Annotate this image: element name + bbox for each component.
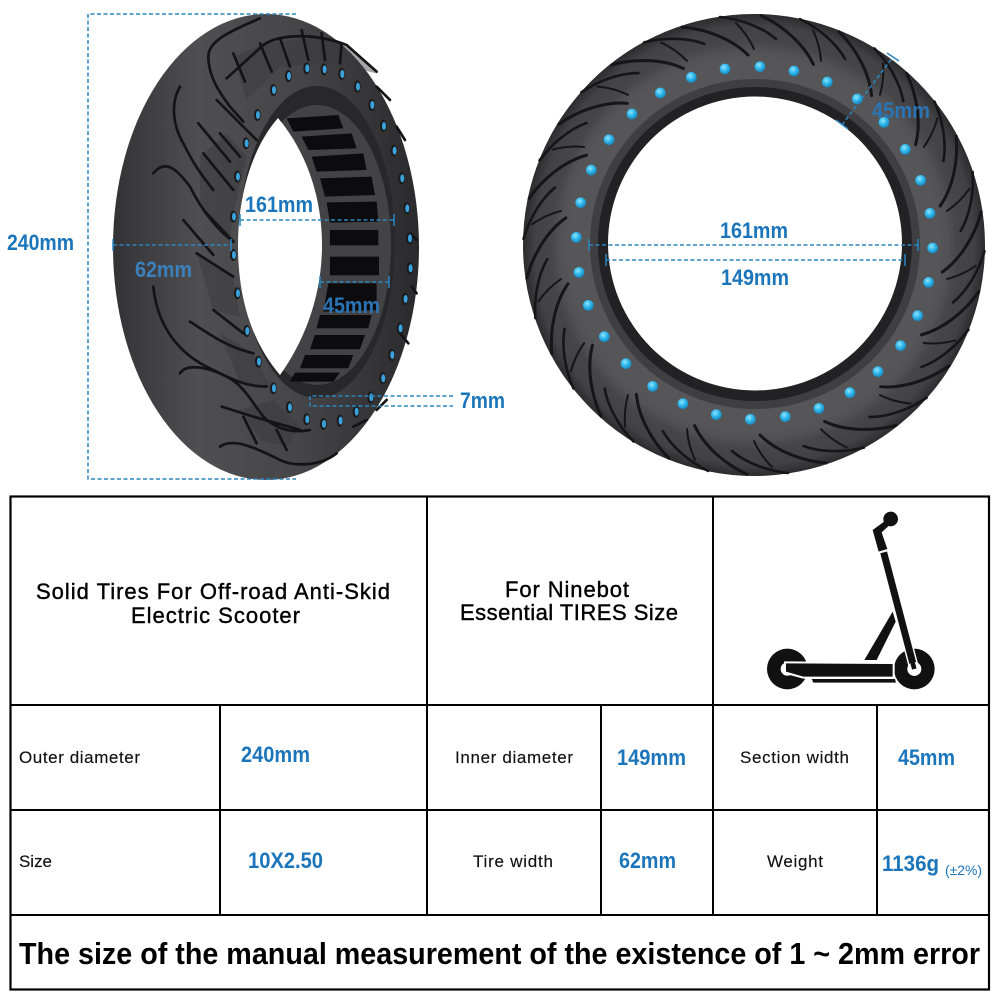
spec: outer diameter: Outer diameter	[19, 748, 140, 767]
spec: weight	[767, 851, 982, 878]
dimension label: 45mm right: 45mm	[872, 98, 930, 123]
dimension label: 62mm: 62mm	[135, 257, 192, 282]
blue dots row	[230, 62, 413, 430]
dimension label: 149mm: 149mm	[721, 265, 789, 290]
spec: section width: 45mm	[898, 745, 955, 770]
spec: inner diameter: Inner diameter	[455, 748, 573, 767]
spec: tire width	[473, 848, 676, 873]
spec: size: 10X2.50	[248, 848, 323, 873]
inner groove	[598, 87, 912, 401]
icon: scooter	[767, 512, 935, 689]
tread blocks	[197, 37, 377, 447]
spec table grid	[10, 496, 989, 990]
spec: outer diameter	[19, 742, 310, 767]
tire hole	[608, 96, 902, 390]
panel: front tire view	[517, 6, 991, 484]
dimension label: 240mm: 240mm	[7, 230, 74, 255]
spec: tire width: Tire width	[473, 852, 553, 871]
model title: For Ninebot	[505, 577, 629, 602]
spec: inner diameter: 149mm	[617, 745, 686, 770]
air slots	[287, 115, 379, 382]
dimension lines	[88, 14, 918, 479]
tire body	[523, 14, 985, 476]
spec: size: Size	[19, 852, 52, 871]
model title: Essential TIRES Size	[460, 600, 678, 625]
rim groove	[239, 86, 395, 398]
spec: tire width: 62mm	[619, 848, 676, 873]
tire hole	[238, 118, 322, 375]
spec: weight: Weight	[767, 852, 823, 871]
dimension label: 45mm left: 45mm	[323, 293, 380, 318]
spec: section width: Section width	[740, 748, 849, 767]
product title: Solid Tires For Off-road Anti-Skid	[36, 579, 390, 604]
tire body outer silhouette	[113, 14, 419, 480]
dimension label: 7mm: 7mm	[460, 388, 505, 413]
rim groove	[590, 79, 920, 409]
spec: weight: (±2%)	[945, 862, 982, 878]
spec: outer diameter: 240mm	[241, 742, 310, 767]
tread pattern	[153, 18, 417, 464]
product title: Electric Scooter	[131, 603, 300, 628]
spec: size	[19, 848, 323, 873]
dimension label: 161mm right: 161mm	[720, 218, 788, 243]
model title	[460, 577, 678, 625]
panel: angled tire view	[113, 14, 419, 480]
spec: section width	[740, 745, 955, 770]
dimension label: 161mm left: 161mm	[245, 192, 313, 217]
spec: inner diameter	[455, 745, 686, 770]
inner wall	[243, 105, 391, 385]
tread pattern	[517, 6, 991, 484]
product title	[36, 579, 390, 628]
spec: weight: 1136g	[882, 851, 939, 876]
blue dots ring	[571, 61, 938, 425]
